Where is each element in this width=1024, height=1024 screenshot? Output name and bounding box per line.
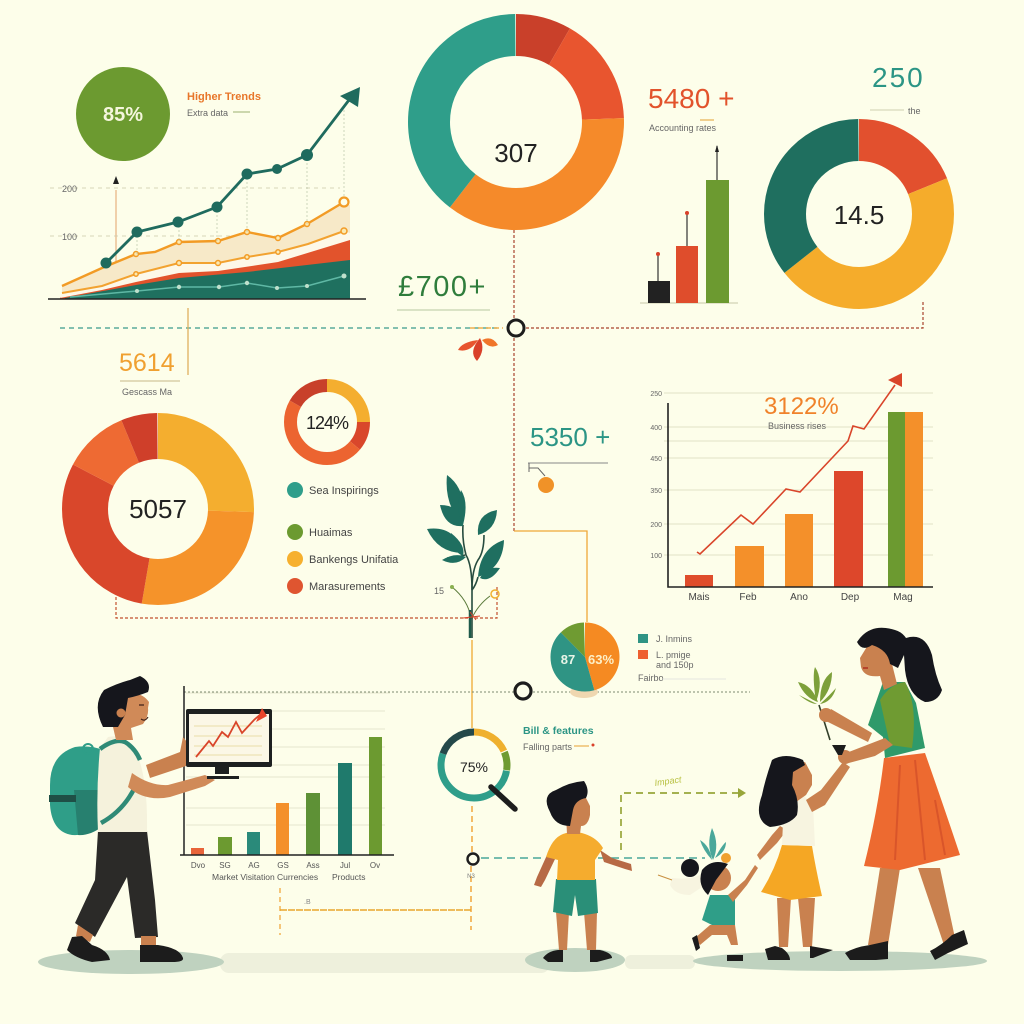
ground shadow [38,950,224,974]
stat: 5480: Accounting rates [649,123,717,133]
head [790,762,812,802]
chart: right bar and trend chart: 450 [650,456,662,463]
shirt [97,736,147,832]
chart: right bar and trend chart: 200 [650,522,662,529]
node: middle [515,683,531,699]
stat: 5614 [119,349,180,397]
stat: 250: 250 [872,62,925,93]
caption: flow arrow label: Impact [654,774,683,788]
shirt [868,682,925,758]
arms [146,737,187,778]
donut value: top center: 307 [494,138,538,168]
heading: chart label [187,91,261,118]
node: lower [468,854,478,864]
person: girl [757,756,850,960]
chart: lower left bars: Dvo [191,861,206,870]
donut value: small: 124% [306,413,349,433]
chart: lower left bars: Jul [340,861,350,870]
connector lines [60,230,923,935]
straps [100,741,140,823]
tiny note: orange path: .B [304,899,311,906]
lips [863,667,868,669]
chart: growth area line chart [48,87,366,299]
chart: right bar and trend chart [650,373,933,603]
tiny axis note: N3 [467,874,475,880]
chart: lower left bars: AG [248,861,260,870]
chart: lower left bars: Ov [370,861,380,870]
skirt [864,753,960,870]
stat: 5614: Gescass Ma [122,387,172,397]
donut value: left large: 5057 [129,494,187,524]
shoes [765,946,790,960]
donut value: top right: 14.5 [834,200,884,230]
chart: right bar and trend chart: Feb [739,592,757,603]
cup [832,745,846,755]
arrow: green dashed head [738,788,746,798]
chart: right bar and trend chart: 250 [650,391,662,398]
stat: 5350 [528,422,610,493]
hair bun [681,859,699,877]
ground shadow [525,948,625,972]
icon: plant: 15 [434,586,444,596]
node: center top [508,320,524,336]
arm [728,865,758,902]
heading: chart label: Higher Trends [187,91,261,103]
text: ring caption: Falling parts [523,742,573,752]
stat: 5480 [648,83,734,133]
stat: 5350: 5350 + [530,422,610,452]
far arm [757,826,787,860]
chart: right bar and trend chart: Ano [790,592,808,603]
flower [721,853,731,863]
chart: lower left bars: SG [219,861,231,870]
leaf accent [458,338,498,361]
chart: right bar and trend chart: 400 [650,425,662,432]
chart: lower left bars [180,686,394,882]
legs [777,898,791,947]
hair [759,756,805,827]
dress [702,895,735,925]
legend: left: Marasurements [309,581,386,593]
badge: green percent circle: 85% [103,104,143,126]
skirt [761,845,822,900]
legs [695,925,738,945]
hair [547,781,588,826]
backpack [49,744,103,835]
person: toddler [658,828,758,961]
person: boy [525,781,632,972]
chart: lower left bars: Market Visitation Currencies [212,872,318,882]
chart: lower left bars: GS [277,861,289,870]
shoes [543,950,563,962]
far arm [826,709,872,742]
chart: right bar and trend chart: Dep [841,592,860,603]
chart: growth area line chart: 200 [62,184,77,194]
legend: pie [638,634,726,683]
legs [556,912,569,950]
shorts [553,879,598,916]
pie chart with hand: 63% [588,652,614,667]
chart: right bar and trend chart: Mais [688,592,710,603]
chart: growth area line chart: 100 [62,232,77,242]
person: man with backpack and monitor [38,676,272,974]
shirt [546,832,603,880]
shoes [845,941,888,960]
text: ring caption: Bill & features [523,725,594,737]
ground texture band [220,953,695,973]
head [705,865,731,891]
plant [700,828,726,860]
plant sprig [798,667,836,740]
donut: top right [785,140,933,288]
shirt [782,795,815,846]
legend: left: Bankengs Unifatia [309,554,399,566]
ring: 75% with magnifier [441,732,515,809]
head [566,796,590,834]
legend: pie: J. Inmins [656,634,693,644]
chart: right bar and trend chart: Mag [893,592,913,603]
legend: left [287,482,399,594]
monitor [186,708,272,779]
stat: 700: £700+ [398,271,487,303]
donut: left large [85,436,231,582]
pointer under badge [113,176,119,262]
stat: 5480: 5480 + [648,83,734,114]
chart: lower left bars: Ass [306,861,320,870]
chart: right bar and trend chart: 100 [650,553,662,560]
arms [534,855,556,887]
donut: top center [429,35,603,209]
donut: small 124% [290,386,364,458]
chart: lower left bars: Products [332,872,366,882]
legend: pie: L. pmige [656,650,691,660]
chart: right bar and trend chart: 350 [650,488,662,495]
head and neck [860,642,897,690]
shoes [67,936,110,962]
ear and face [116,708,126,718]
stat: 3122%: 3122% [764,393,839,420]
hair [857,628,942,702]
text: ring caption [523,725,594,752]
badge: green percent circle [76,67,170,161]
feet [76,925,93,942]
legs [75,831,158,938]
ring: 75% with magnifier: 75% [460,759,488,775]
pie chart with hand: 87 [561,652,575,667]
stat: 250 [870,62,925,116]
white bag [670,875,702,895]
chart: small bars [640,145,738,303]
near arm [806,762,850,812]
stat: 250: the [908,106,921,116]
legend: left: Sea Inspirings [309,485,379,497]
icon: plant [427,475,504,638]
head [112,694,149,740]
legend: pie: and 150p [656,660,694,670]
person: mother with plant [693,628,987,971]
ground shadow [693,951,987,971]
stat: 5614: 5614 [119,349,175,377]
hair [98,676,149,727]
legs [868,868,900,945]
pie chart with hand [561,640,614,698]
near arm [841,738,893,764]
heading: chart label: Extra data [187,108,228,118]
stat: 3122%: Business rises [768,421,827,431]
legend: left: Huaimas [309,527,353,539]
legend: pie: Fairbo [638,673,664,683]
